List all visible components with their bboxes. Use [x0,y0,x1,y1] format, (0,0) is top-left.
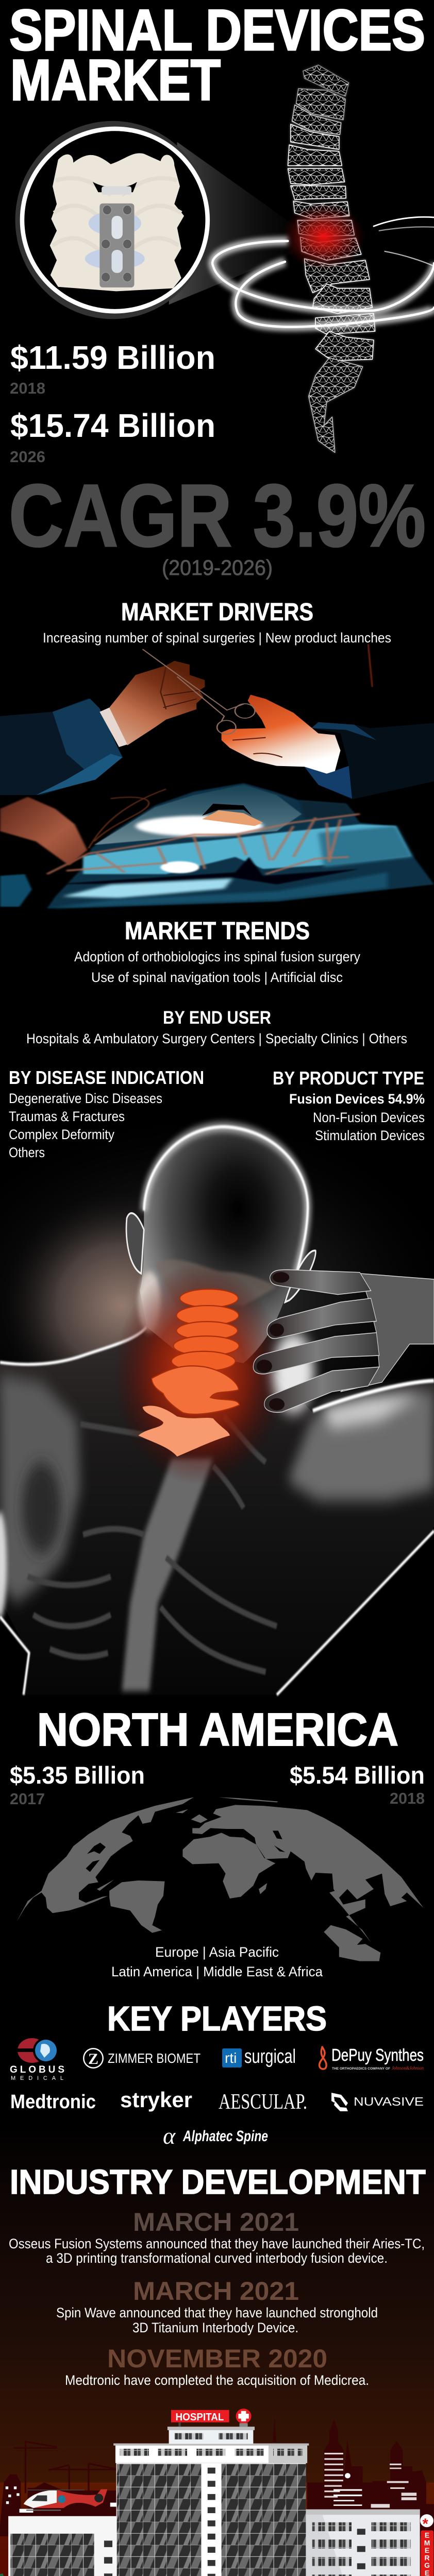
left glove [109,661,205,745]
logo: RTI Surgical: surgical [244,2046,296,2067]
right building [306,2510,420,2576]
head [140,1127,308,1363]
by disease indication: Complex Deformity [9,1127,114,1142]
development: November 2020: NOVEMBER 2020 [107,2344,327,2373]
key players heading: KEY PLAYERS [107,1999,327,2038]
light rings glow [212,241,434,327]
logo: NuVasive [331,2093,424,2111]
rim lights [0,1327,434,1695]
development: March 2021 Osseus: MARCH 2021 [133,2208,299,2236]
head rim [144,1127,308,1276]
madagascar [259,1883,267,1894]
logo: Zimmer Biomet: Z [88,2050,98,2067]
market size 2026: $15.74 Billion [10,407,215,444]
development: March 2021 Spin Wave: MARCH 2021 [133,2277,299,2306]
north america 2018: $5.54 Billion [290,1761,425,1789]
arctic islands [219,1797,278,1802]
north america 2017 [10,1761,145,1808]
emergency sign: E [425,2532,429,2539]
red pain glow [282,202,365,270]
development: March 2021 Osseus [9,2208,425,2266]
lower left cloth [0,874,32,907]
by end user: BY END USER [163,1008,271,1028]
spine vertebrae glow [288,65,375,452]
logo: Alphatec Spine: Alphatec Spine [182,2128,268,2145]
british isles [191,1815,208,1823]
development: March 2021 Osseus: a 3D printing transformational curved interbody fusion device. [46,2250,388,2266]
by disease indication: Degenerative Disc Diseases [9,1091,162,1106]
logo: Zimmer Biomet [83,2048,201,2069]
north america 2018 [290,1761,425,1807]
fingernails [257,1272,289,1411]
by product type [273,1067,425,1143]
hospital scene [0,2409,434,2576]
logo: RTI Surgical [222,2046,296,2067]
right sleeve [305,722,434,800]
skyline windows [6,2453,416,2513]
market size 2026 [10,407,215,466]
tower top [115,2445,307,2463]
hospital sign [171,2409,252,2427]
black shadow strip [50,857,360,885]
north america [10,1797,194,1946]
logo: Medtronic: Medtronic [10,2091,96,2113]
orange tubes [89,789,166,849]
left chest [0,1375,80,1603]
by product type: Fusion Devices 54.9% [289,1091,425,1107]
north america 2018: 2018 [390,1789,425,1807]
hudson bay [87,1843,106,1854]
right shoulder [288,1390,434,1500]
sky dark red [0,2482,434,2576]
black gap [93,182,137,192]
north america 2017: 2017 [10,1790,45,1808]
central america [97,1879,114,1891]
market trends: MARKET TRENDS [125,918,310,945]
logo: NuVasive: NUVASIVE [354,2095,424,2108]
bright palm glow [273,1333,314,1413]
light rings [212,217,434,327]
blue discs [89,211,141,235]
left sleeve [0,698,123,795]
market drivers: MARKET DRIVERS [121,599,313,626]
hospital sign: HOSPITAL [175,2412,224,2423]
left blurred hand [0,797,87,866]
logo: DePuy Synthes: THE ORTHOPAEDICS COMPANY OF [332,2067,390,2071]
development: March 2021 Spin Wave: Spin Wave announced that they have launched stronghold [56,2305,378,2320]
head rim glow [144,1127,308,1276]
emergency sign: * [422,2516,429,2532]
incision [202,804,252,816]
logo: Aesculap: AESCULAP. [219,2090,307,2114]
hemostat [143,649,255,734]
market size 2018 [10,339,215,397]
market trends: Use of spinal navigation tools | Artificial disc [91,970,343,985]
vertebrae bones [50,153,184,291]
trees [0,2573,434,2576]
logo: Globus Medical [10,2038,64,2081]
logo: Globus Medical: GLOBUS [10,2064,64,2075]
by disease indication: BY DISEASE INDICATION [9,1067,204,1088]
CAGR: (2019-2026) [162,555,273,580]
by disease indication: Traumas & Fractures [9,1109,125,1124]
skull base [155,1260,277,1306]
north america 2017: $5.35 Billion [10,1761,145,1789]
figure: neck pain x-ray torso [0,1108,434,1695]
regions [111,1944,323,1979]
title [9,0,425,112]
ribs [28,1416,277,1672]
africa [182,1833,275,1899]
circle inset: cervical plate [15,121,210,319]
neck glow [0,1184,249,1428]
development: November 2020: Medtronic have completed the acquisition of Medicrea. [65,2372,369,2388]
logo: DePuy Synthes: Johnson&Johnson [392,2065,424,2071]
hand [253,1269,434,1412]
development: March 2021 Spin Wave [56,2277,378,2335]
cyan sheet [83,824,411,874]
logo: Alphatec Spine: α [163,2123,176,2149]
by disease indication: Others [9,1145,45,1160]
spine vertebrae [288,65,375,452]
iceland [176,1809,188,1813]
caspian and gulf [273,1831,285,1852]
southeast asia islands [329,1891,371,1942]
market drivers [43,599,391,646]
by product type: Stimulation Devices [315,1128,425,1143]
market size 2018: $11.59 Billion [10,339,215,376]
drape [47,783,434,908]
ears [126,1213,144,1274]
spine lower [122,1459,213,1691]
title: MARKET [10,48,221,112]
left building [8,2516,117,2576]
white lit area [136,816,263,836]
cervical vertebrae [138,1289,240,1456]
market trends [74,918,360,985]
regions: Latin America | Middle East & Africa [111,1964,323,1979]
development: November 2020 [65,2344,369,2388]
right glove [222,694,341,774]
upper disc [102,187,131,195]
cranes [14,2442,116,2510]
brown lower background [0,2123,434,2576]
north america: NORTH AMERICA [37,1704,398,1756]
logo: Zimmer Biomet: ZIMMER BIOMET [108,2050,201,2066]
emergency sign: M [424,2539,430,2547]
development: March 2021 Spin Wave: 3D Titanium Interbody Device. [132,2320,298,2335]
regions: Europe | Asia Pacific [155,1944,279,1960]
market drivers: Increasing number of spinal surgeries | New product launches [43,630,391,646]
eurasia [192,1805,424,1908]
metal plate [99,204,134,287]
by end user [26,1008,407,1046]
jaw light [138,1272,160,1333]
background glows [0,1108,434,1489]
emergency sign: G [424,2562,430,2569]
logo: RTI Surgical: rti [225,2050,237,2066]
illustration: glowing spine with rings [169,65,434,452]
logo: Alphatec Spine [163,2123,268,2149]
cable light [368,644,372,687]
great lakes [86,1860,99,1872]
logo: DePuy Synthes [320,2045,424,2071]
by end user: Hospitals & Ambulatory Surgery Centers | Specialty Clinics | Others [26,1031,407,1046]
orange aura [113,1264,285,1485]
torso [0,1327,434,1695]
main tower [116,2463,306,2576]
lower bright band [62,878,232,898]
clamps and instruments [47,814,360,874]
skyline [0,2416,434,2536]
by disease indication [9,1067,204,1160]
emergency sign: R [425,2554,430,2562]
photo: surgeons passing instrument [0,644,434,908]
market size 2026: 2026 [10,448,45,466]
australia [324,1925,380,1961]
market trends: Adoption of orthobiologics ins spinal fusion surgery [74,949,360,964]
south america [109,1880,165,1933]
logo: Stryker: stryker [120,2088,192,2112]
emergency sign [420,2514,433,2576]
helicopter [24,2489,107,2510]
logo: Globus Medical: MEDICAL [11,2075,63,2081]
emergency sign: E [425,2547,429,2554]
market size 2018: 2018 [10,379,45,397]
zoom cone [169,142,305,304]
globe map [10,1797,424,1961]
